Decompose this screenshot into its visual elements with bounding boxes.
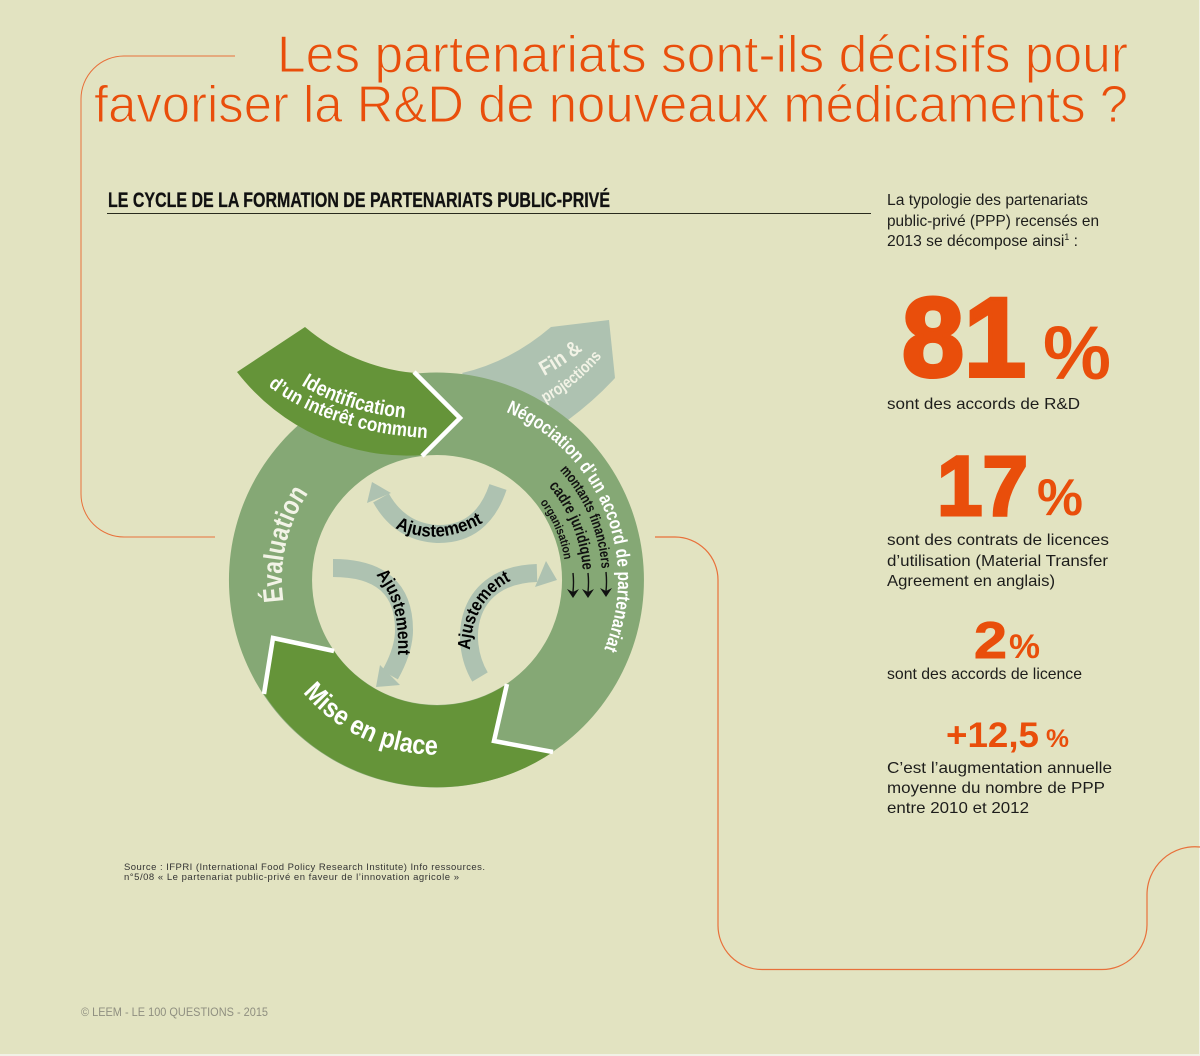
segment: identification d'un interet commun — [237, 327, 463, 458]
stat: 17 percent: d’utilisation (Material Transfer — [887, 553, 1109, 570]
segment: mise en place — [262, 635, 554, 788]
source note — [124, 862, 485, 883]
segment: mise en place: Mise en place — [304, 681, 437, 755]
stat: 2 percent: 2 — [974, 612, 1007, 670]
adjustment arrow: right: Ajustement — [458, 571, 511, 650]
stat: 81 percent: sont des accords de R&D — [887, 396, 1080, 413]
intro text: : — [1069, 233, 1078, 250]
segment: identification d'un interet commun: Identification — [302, 373, 405, 418]
stat: 17 percent: 17 — [937, 439, 1028, 533]
stat: plus 12,5 percent: moyenne du nombre de PPP — [887, 780, 1105, 797]
stat: 2 percent — [887, 612, 1082, 683]
stat: 17 percent: sont des contrats de licences — [887, 532, 1109, 549]
intro text: 1 — [1064, 232, 1069, 242]
intro text: 2013 se décompose ainsi — [887, 233, 1068, 250]
stat: plus 12,5 percent: entre 2010 et 2012 — [887, 800, 1029, 817]
cycle diagram — [228, 320, 644, 788]
stat: 81 percent: % — [1043, 311, 1111, 396]
stat: 81 percent: 81 — [902, 275, 1026, 400]
adjustment arrow: top: Ajustement — [396, 513, 483, 537]
stat: 2 percent: sont des accords de licence — [887, 666, 1082, 683]
stat: plus 12,5 percent — [887, 716, 1112, 817]
sub-labels: montants, cadre, organisation: organisation — [541, 500, 570, 560]
decorative line: top left frame — [81, 56, 235, 537]
adjustment arrow: left: Ajustement — [376, 570, 410, 655]
stat: plus 12,5 percent: C’est l’augmentation annuelle — [887, 760, 1112, 777]
title: favoriser la R&D de nouveaux médicaments ? — [94, 76, 1128, 134]
ring: negociation et evaluation — [229, 372, 644, 788]
sub-labels: montants, cadre, organisation: cadre juridique — [550, 482, 591, 570]
intro text: La typologie des partenariats — [887, 192, 1088, 209]
copyright: © LEEM - LE 100 QUESTIONS - 2015 — [81, 1005, 268, 1019]
adjustment arrow: top — [367, 482, 506, 543]
intro text — [887, 192, 1099, 250]
segment: identification d'un interet commun: d’un intérêt commun — [270, 378, 427, 438]
source note: n°5/08 « Le partenariat public-privé en faveur de l’innovation agricole » — [124, 872, 459, 883]
section heading: LE CYCLE DE LA FORMATION DE PARTENARIATS PUBLIC-PRIVÉ — [108, 189, 610, 212]
label: negociation d'un accord de partenariat: Négociation d’un accord de partenariat — [507, 400, 630, 653]
segment: fin et projections — [462, 320, 615, 420]
decorative line: bottom right frame — [655, 537, 1200, 970]
title — [94, 26, 1128, 134]
stat: 81 percent — [887, 275, 1111, 413]
title: Les partenariats sont-ils décisifs pour — [277, 26, 1128, 84]
stat: plus 12,5 percent: % — [1046, 725, 1069, 753]
segment: fin et projections: projections — [542, 352, 600, 406]
adjustment arrow: right — [458, 561, 557, 682]
stat: 17 percent: Agreement en anglais) — [887, 573, 1055, 590]
stat: plus 12,5 percent: +12,5 — [946, 716, 1039, 755]
stat: 17 percent — [887, 439, 1109, 590]
source note: Source : IFPRI (International Food Policy Research Institute) Info ressources. — [124, 862, 485, 873]
label: evaluation: Évaluation — [258, 488, 308, 602]
stat: 17 percent: % — [1037, 469, 1083, 527]
segment: fin et projections: Fin & — [538, 342, 582, 376]
intro text: public-privé (PPP) recensés en — [887, 213, 1099, 230]
stat: 2 percent: % — [1009, 628, 1040, 666]
sub-labels: montants, cadre, organisation: montants financiers — [560, 466, 610, 568]
adjustment arrow: left — [333, 559, 413, 687]
small black arrows — [567, 572, 612, 598]
